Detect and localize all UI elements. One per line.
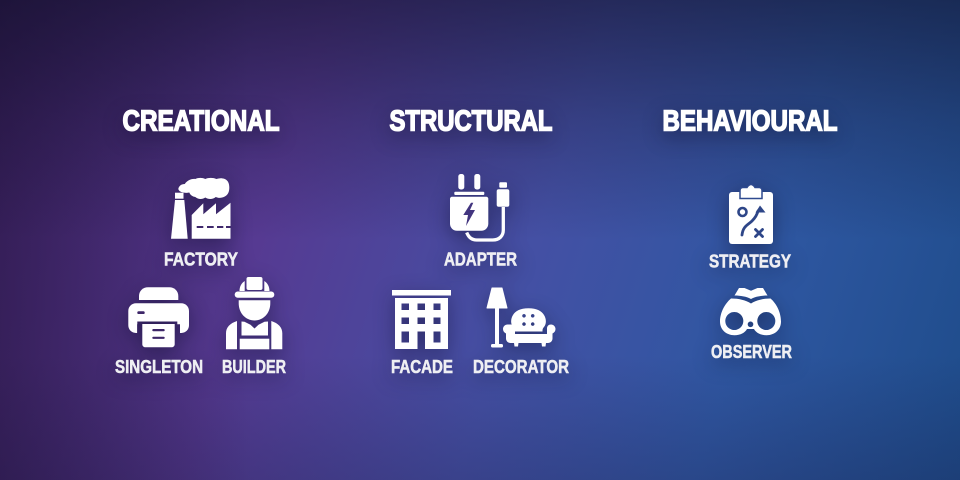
label: adapter: ADAPTER xyxy=(444,250,517,270)
panel: creational xyxy=(115,106,286,377)
label: singleton: SINGLETON xyxy=(115,357,203,377)
panel: structural xyxy=(390,106,569,377)
heading: behavioural: BEHAVIOURAL xyxy=(662,106,838,138)
panel: behavioural xyxy=(662,106,838,362)
label: decorator: DECORATOR xyxy=(473,357,569,377)
label: facade: FACADE xyxy=(391,357,453,377)
label: observer: OBSERVER xyxy=(711,342,792,362)
icon: strategy clipboard xyxy=(729,184,773,244)
icon: singleton printer xyxy=(128,287,189,347)
heading: structural: STRUCTURAL xyxy=(390,106,552,138)
icon: factory xyxy=(171,178,230,239)
label: builder: BUILDER xyxy=(222,357,286,377)
label: factory: FACTORY xyxy=(164,250,238,270)
label: strategy: STRATEGY xyxy=(709,252,791,272)
icon: builder xyxy=(226,277,282,349)
icon: adapter xyxy=(450,174,509,240)
icon: decorator lamp and sofa xyxy=(487,288,556,348)
icon: observer binoculars xyxy=(720,288,781,335)
icon: facade building xyxy=(392,290,451,349)
heading: creational: CREATIONAL xyxy=(122,106,280,138)
